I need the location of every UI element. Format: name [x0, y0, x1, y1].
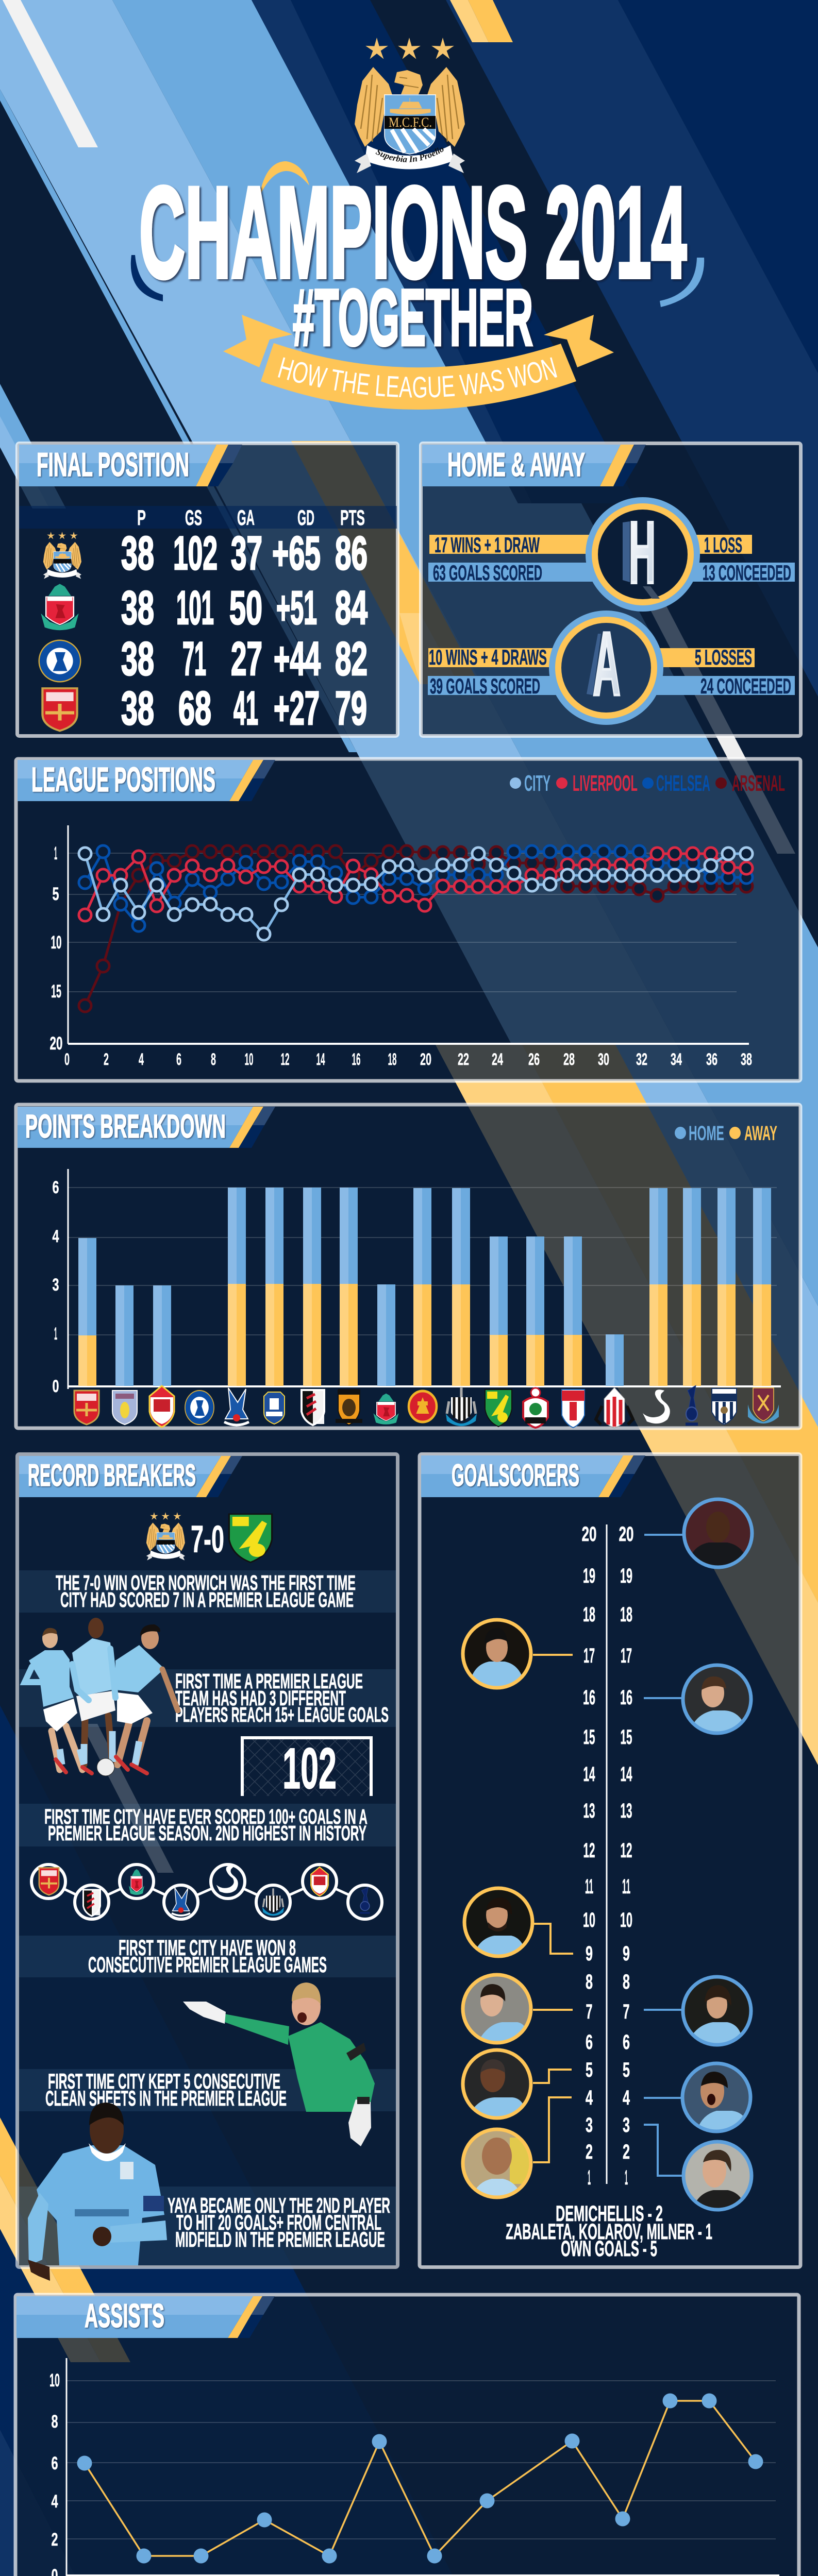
- row: Liverpool: 50: [229, 582, 262, 634]
- row: Chelsea: 27: [231, 633, 262, 685]
- goals scale axis: 6: [586, 2031, 593, 2054]
- line chart: assists per player: [49, 2358, 781, 2576]
- goals scale axis: 2: [586, 2141, 593, 2163]
- row: Manchester City: 37: [231, 527, 262, 580]
- legend: home and away: HOME: [689, 1122, 724, 1145]
- record: 7-0 win over Norwich: CITY HAD SCORED 7 IN A PREMIER LEAGUE GAME: [60, 1588, 354, 1612]
- goals scale axis: 13: [583, 1800, 595, 1822]
- goals scale axis: 8: [586, 1971, 593, 1993]
- goals scale axis: 5: [586, 2059, 593, 2081]
- record: 5 consecutive clean sheets: FIRST TIME CITY KEPT 5 CONSECUTIVE: [48, 2069, 280, 2093]
- y axis labels: 1: [54, 1324, 57, 1344]
- other scorers text: OWN GOALS - 5: [561, 2236, 657, 2261]
- goals scale axis: 15: [583, 1726, 595, 1749]
- away stat bars: 39 GOALS SCORED: [430, 674, 540, 698]
- y axis labels: 8: [52, 2412, 58, 2432]
- goals scale axis: 11: [585, 1875, 593, 1898]
- away stat bars: [428, 645, 795, 698]
- table column header band: P: [137, 505, 146, 530]
- portrait: Stevan Jovetic, 3 goals: [681, 2140, 754, 2212]
- record: 8 consecutive wins: FIRST TIME CITY HAVE WON 8: [119, 1936, 296, 1960]
- y axis labels: [49, 843, 63, 1054]
- y axis labels: [53, 1178, 59, 1396]
- x axis labels: [64, 1050, 752, 1069]
- row: Arsenal: 41: [233, 682, 258, 735]
- club crest: Manchester City: M.C.F.C.: [389, 115, 432, 130]
- panel: assists: [15, 2295, 799, 2576]
- goals scale axis: 3: [586, 2114, 593, 2137]
- opponent club badges: [74, 1385, 779, 1428]
- x axis labels: 34: [671, 1050, 682, 1069]
- y axis labels: 3: [53, 1275, 59, 1295]
- y axis labels: 20: [49, 1033, 63, 1054]
- row: Liverpool: 38: [121, 582, 154, 634]
- goals scale axis: 14: [583, 1763, 595, 1786]
- portrait: Yaya Toure, 20 goals: [682, 1497, 754, 1569]
- line chart: league position by game: [49, 825, 752, 1069]
- table column header band: [19, 505, 397, 530]
- x axis labels: 30: [598, 1050, 609, 1069]
- record: 102 goals: PREMIER LEAGUE SEASON. 2ND HIGHEST IN HISTORY: [48, 1821, 366, 1845]
- section header: goalscorers: GOALSCORERS: [452, 1458, 579, 1493]
- record: 102 goals: 102: [282, 1736, 337, 1801]
- portrait: Edin Dzeko, 16 goals: [681, 1663, 753, 1735]
- section header: home and away: HOME & AWAY: [447, 446, 585, 483]
- goals scale axis: 10: [583, 1909, 595, 1931]
- y axis labels: 4: [52, 2492, 58, 2512]
- goals scale axis: 19: [583, 1565, 595, 1587]
- y axis labels: 1: [54, 843, 57, 863]
- other scorers text: DEMICHELLIS - 2: [556, 2201, 663, 2226]
- series: Chelsea: [85, 852, 746, 925]
- x axis labels: 22: [458, 1050, 469, 1069]
- goals scale axis: 3: [623, 2114, 630, 2137]
- x axis labels: 6: [176, 1050, 181, 1069]
- home stat bars: [428, 533, 795, 585]
- table column header band: GA: [237, 505, 255, 530]
- section header: points breakdown: POINTS BREAKDOWN: [25, 1108, 226, 1145]
- goals scale axis: 9: [586, 1942, 593, 1965]
- away portions of bars: [78, 1284, 771, 1386]
- x axis labels: 14: [316, 1050, 325, 1069]
- illustration: three players: [25, 1618, 178, 1776]
- row: Manchester City: 38: [121, 527, 154, 580]
- section header: final position: [19, 445, 242, 486]
- goals scale axis: 17: [583, 1645, 595, 1667]
- title decorative arcs: [131, 161, 704, 307]
- away stat bars: 10 WINS + 4 DRAWS: [429, 645, 547, 669]
- section header: record breakers: RECORD BREAKERS: [28, 1458, 196, 1493]
- record: three 15+ goal players: TEAM HAS HAD 3 DIFFERENT: [175, 1686, 346, 1710]
- x axis labels: 16: [352, 1050, 361, 1069]
- y axis labels: 2: [52, 2530, 58, 2550]
- goals scale axis: 20: [581, 1523, 597, 1546]
- goals scale axis: 8: [623, 1971, 630, 1993]
- record: 102 goals: FIRST TIME CITY HAVE EVER SCORED 100+ GOALS IN A: [44, 1805, 368, 1828]
- portrait: Alvaro Negredo, 9 goals: [462, 1886, 535, 1958]
- club crest: Manchester City: Superbia In Proelio: [375, 147, 443, 162]
- row: Manchester City: 86: [335, 527, 368, 580]
- record: 5 consecutive clean sheets: CLEAN SHEETS IN THE PREMIER LEAGUE: [45, 2086, 287, 2110]
- panel: goalscorers: [420, 1454, 800, 2267]
- section header: assists: [16, 2296, 275, 2338]
- goals scale axis: [581, 1523, 634, 2189]
- row: Arsenal: 79: [335, 682, 367, 735]
- section header: league positions: LEAGUE POSITIONS: [31, 760, 215, 799]
- portrait: Vincent Kompany, 4 goals: [461, 2127, 533, 2199]
- record: 102 goals: [19, 1736, 396, 1846]
- goals scale axis: 1: [588, 2166, 591, 2189]
- home portions of bars: [78, 1188, 771, 1386]
- illustration: goalkeeper: [183, 1982, 375, 2146]
- table column header band: PTS: [340, 505, 365, 530]
- home stat bars: 17 WINS + 1 DRAW: [435, 533, 540, 557]
- row: Arsenal: +27: [274, 682, 320, 735]
- goals scale axis: 4: [586, 2087, 593, 2109]
- legend: teams: LIVERPOOL: [573, 771, 638, 796]
- illustration: Yaya Toure: [28, 2103, 167, 2281]
- goals scale axis: 18: [583, 1603, 595, 1626]
- record: Yaya Toure 20 goals: MIDFIELD IN THE PREMIER LEAGUE: [175, 2227, 385, 2251]
- y axis labels: 0: [53, 1377, 59, 1396]
- goals scale axis: 19: [620, 1565, 632, 1587]
- record: 7-0 win over Norwich: [19, 1512, 396, 1613]
- club crest: Manchester City: [355, 38, 465, 173]
- record: 7-0 win over Norwich: THE 7-0 WIN OVER NORWICH WAS THE FIRST TIME: [56, 1571, 356, 1595]
- goals scale axis: 15: [621, 1726, 632, 1749]
- away stat bars: 5 LOSSES: [695, 645, 752, 669]
- x axis labels: 36: [706, 1050, 717, 1069]
- goals scale axis: 14: [621, 1763, 632, 1786]
- row: Liverpool: [41, 582, 368, 634]
- panel: points breakdown: [16, 1105, 800, 1428]
- row: Chelsea: +44: [274, 633, 321, 685]
- row: Manchester City: 102: [173, 527, 218, 580]
- x axis labels: 12: [280, 1050, 290, 1069]
- record: 5 consecutive clean sheets: [19, 1982, 396, 2146]
- goals scale axis: 5: [623, 2059, 630, 2081]
- goals scale axis: 20: [619, 1523, 634, 1546]
- record: three 15+ goal players: PLAYERS REACH 15+ LEAGUE GOALS: [175, 1703, 389, 1726]
- legend: home and away: [675, 1122, 777, 1145]
- x axis labels: 4: [139, 1050, 144, 1069]
- goals scale axis: 9: [623, 1942, 630, 1965]
- row: Arsenal: 68: [178, 682, 211, 735]
- x axis labels: 26: [528, 1050, 540, 1069]
- x axis labels: 32: [636, 1050, 647, 1069]
- row: Manchester City: [43, 527, 368, 580]
- goals scale axis: 12: [621, 1839, 632, 1862]
- away badge A: [549, 611, 663, 725]
- section header: record breakers: [19, 1456, 242, 1497]
- x axis labels: 8: [211, 1050, 216, 1069]
- table column header band: GS: [185, 505, 202, 530]
- section header: final position: FINAL POSITION: [37, 446, 189, 483]
- x axis labels: 0: [64, 1050, 70, 1069]
- home badge H: [586, 497, 700, 612]
- record: three 15+ goal players: [19, 1618, 396, 1776]
- record: three 15+ goal players: FIRST TIME A PREMIER LEAGUE: [175, 1669, 363, 1693]
- row: Liverpool: 101: [176, 582, 214, 634]
- table column header band: GD: [297, 505, 314, 530]
- ribbon: how the league was won: [223, 315, 614, 410]
- row: Chelsea: 82: [335, 633, 368, 685]
- goals scale axis: 7: [586, 2001, 593, 2023]
- goals scale axis: 13: [621, 1800, 632, 1822]
- legend: teams: CITY: [524, 771, 550, 796]
- y axis labels: [49, 2370, 60, 2576]
- row: Chelsea: 38: [121, 633, 154, 685]
- record: 8 consecutive wins: CONSECUTIVE PREMIER LEAGUE GAMES: [88, 1953, 327, 1977]
- x axis labels: 10: [244, 1050, 254, 1069]
- x axis labels: 2: [104, 1050, 109, 1069]
- section header: goalscorers: [421, 1455, 645, 1497]
- section header: points breakdown: [18, 1107, 275, 1148]
- goals scale axis: 2: [623, 2141, 630, 2163]
- row: Liverpool: +51: [276, 582, 317, 634]
- goals scale axis: 12: [583, 1839, 595, 1862]
- y axis labels: 5: [53, 884, 59, 904]
- home stat bars: 1 LOSS: [704, 533, 742, 557]
- row: Arsenal: 38: [121, 682, 154, 735]
- goals scale axis: 6: [623, 2031, 630, 2054]
- portrait: Fernandinho, 5 goals: [461, 2048, 533, 2120]
- record: 8 consecutive wins: [19, 1865, 396, 1977]
- series: Liverpool: [85, 854, 746, 915]
- row: Liverpool: 84: [335, 582, 368, 634]
- portrait: David Silva, 7 goals: [681, 1975, 753, 2047]
- goals scale axis: 4: [623, 2087, 630, 2109]
- record: Yaya Toure 20 goals: TO HIT 20 GOALS+ FROM CENTRAL: [176, 2210, 381, 2234]
- y axis labels: 10: [51, 933, 62, 953]
- x axis labels: 18: [388, 1050, 397, 1069]
- x axis labels: 24: [492, 1050, 503, 1069]
- goals scale axis: 18: [620, 1603, 632, 1626]
- x axis labels: 28: [563, 1050, 575, 1069]
- portrait: Jesus Navas, 4 goals: [680, 2061, 753, 2133]
- stacked bar chart: points by opponent: [53, 1169, 781, 1396]
- legend: teams: [510, 771, 785, 796]
- section header: home and away: [422, 445, 646, 486]
- panel: home and away: [421, 443, 801, 736]
- record: 7-0 win over Norwich: 7-0: [191, 1518, 224, 1561]
- goals scale axis: 16: [620, 1686, 632, 1709]
- portrait: Samir Nasri, 7 goals: [461, 1973, 533, 2045]
- x axis labels: 20: [420, 1050, 431, 1069]
- panel: record breakers: [18, 1454, 398, 2281]
- panel: league positions: [16, 759, 800, 1081]
- y axis labels: 10: [49, 2370, 60, 2391]
- y axis labels: 15: [51, 981, 61, 1002]
- home stat bars: 63 GOALS SCORED: [433, 561, 542, 585]
- goals scale axis: 10: [620, 1909, 632, 1931]
- x axis labels: 38: [741, 1050, 752, 1069]
- row: Manchester City: +65: [272, 527, 321, 580]
- y axis labels: 6: [53, 1178, 59, 1197]
- goals scale axis: 17: [621, 1645, 632, 1667]
- connector lines: [533, 1535, 683, 2176]
- goals scale axis: 11: [622, 1875, 630, 1898]
- series: City: [85, 854, 746, 934]
- other scorers text: [506, 2201, 712, 2261]
- row: Chelsea: 71: [182, 633, 206, 685]
- ribbon: how the league was won: HOW THE LEAGUE WAS WON: [278, 358, 557, 398]
- record: Yaya Toure 20 goals: [19, 2103, 396, 2281]
- legend: teams: CHELSEA: [656, 771, 710, 796]
- y axis labels: 6: [52, 2453, 58, 2473]
- panel: final position: [18, 443, 398, 736]
- legend: home and away: AWAY: [744, 1122, 777, 1145]
- series: Arsenal: [85, 852, 746, 1006]
- section header: assists: ASSISTS: [85, 2297, 164, 2334]
- row: Arsenal: [42, 682, 367, 735]
- away badge A: A: [593, 614, 621, 715]
- portrait: Sergio Aguero, 17 goals: [461, 1618, 533, 1690]
- goals scale axis: 7: [623, 2001, 630, 2023]
- home badge H: H: [629, 504, 656, 602]
- goals scale axis: 16: [583, 1686, 595, 1709]
- row: Chelsea: [39, 633, 368, 685]
- infographic page: #TOGETHER: [293, 273, 533, 363]
- y axis labels: 4: [53, 1227, 59, 1246]
- section header: league positions: [18, 760, 275, 801]
- record: Yaya Toure 20 goals: YAYA BECAME ONLY THE 2ND PLAYER: [168, 2193, 390, 2217]
- goals scale axis: 1: [625, 2166, 628, 2189]
